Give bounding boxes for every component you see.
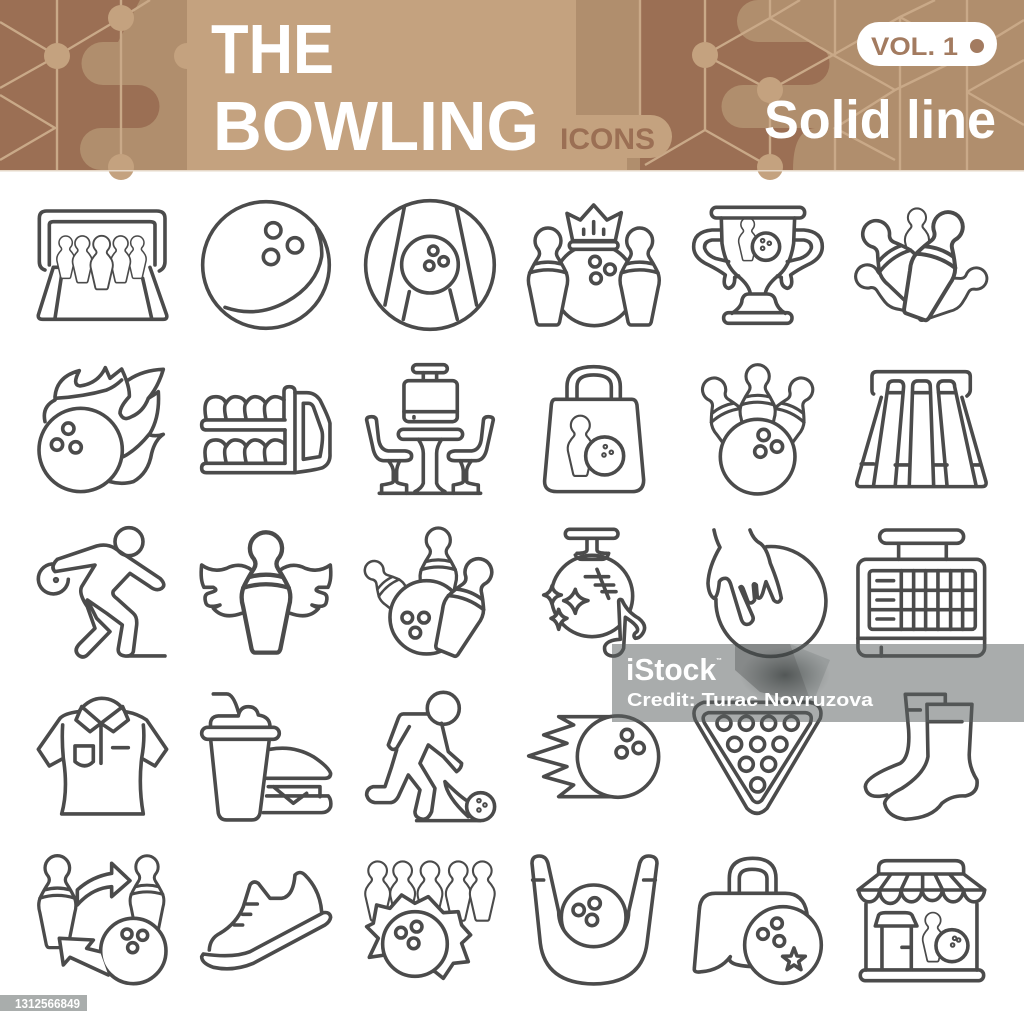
- icon: polo shirt: [38, 698, 167, 814]
- icon: table and monitor: [367, 365, 493, 493]
- watermark band: iStock: [626, 652, 717, 687]
- icon: triangle ball rack: [694, 702, 821, 813]
- icon: ball rack: [202, 387, 330, 473]
- icon: winged pin: [201, 532, 331, 653]
- subtitle: Solid line: Solid line: [764, 90, 996, 150]
- icon: hand holding ball: [708, 530, 826, 656]
- icon: pins and ball with arrows: [39, 856, 166, 984]
- header banner: [0, 0, 1024, 180]
- icon: bowling shoe: [202, 872, 331, 969]
- icon: rock hand with ball: [532, 856, 657, 984]
- icon: lanes: [857, 372, 986, 487]
- icon: ball with crown and pins: [528, 205, 659, 326]
- icon: bowling lane with pins: [38, 211, 167, 319]
- icon: flying ball: [529, 716, 659, 797]
- subtitle pill: ICONS: [553, 115, 672, 170]
- badge: VOL. 1: VOL. 1: [871, 33, 958, 61]
- icon: scattered pins: [849, 205, 994, 327]
- icon: socks: [865, 694, 977, 819]
- icon: person bowling with ball: [367, 692, 495, 821]
- icon: trophy: [694, 207, 822, 323]
- watermark band: [612, 644, 1024, 722]
- watermark band: ™: [716, 657, 722, 664]
- icon: disco ball with music note: [544, 529, 645, 656]
- icon: ball and three pins: [693, 365, 822, 494]
- badge: VOL. 1: [857, 22, 997, 66]
- icon: ball striking pins: [357, 528, 502, 660]
- subtitle pill: ICONS: ICONS: [560, 123, 655, 156]
- icon: scoreboard terminal: [858, 530, 985, 656]
- title: THE BOWLING: THE: [211, 10, 334, 88]
- title: THE BOWLING: BOWLING: [213, 87, 539, 165]
- icon: ball bag with star: [694, 858, 821, 983]
- stock id tag: [0, 995, 87, 1011]
- icon: bowler throwing: [38, 528, 165, 657]
- icon: ball on lane: [366, 201, 494, 329]
- watermark band: Credit: Turac Novruzova: [627, 689, 874, 710]
- icon: drink and burger: [202, 694, 331, 820]
- stock id tag: 1312566849: [15, 997, 80, 1011]
- icon: bowling ball: [203, 202, 329, 328]
- icon: shopping bag with pin: [545, 367, 644, 492]
- icon: bowling shop: [858, 861, 985, 981]
- icon: ball hitting five pins: [365, 861, 495, 978]
- icon: ball on fire: [39, 368, 163, 492]
- title: THE BOWLING: [211, 10, 539, 165]
